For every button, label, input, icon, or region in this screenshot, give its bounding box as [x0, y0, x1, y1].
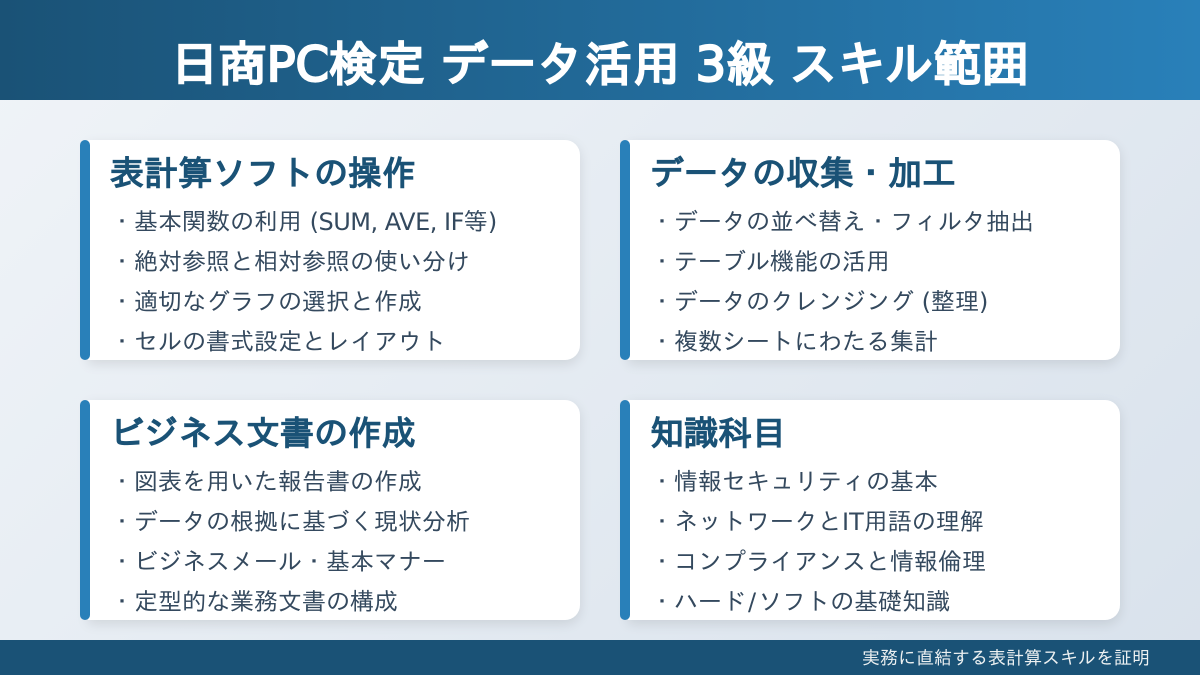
heading: knowledge subjects: 知識科目	[650, 414, 786, 454]
list: data skills	[650, 208, 1034, 356]
list: data skills: ・テーブル機能の活用	[650, 248, 890, 276]
header banner	[0, 0, 1200, 100]
footer bar	[0, 640, 1200, 675]
list: document skills	[110, 468, 470, 616]
panel: data collection and processing	[620, 140, 1122, 366]
list: document skills: ・ビジネスメール・基本マナー	[110, 548, 446, 576]
list: spreadsheet skills: ・セルの書式設定とレイアウト	[110, 328, 446, 356]
list: spreadsheet skills: ・適切なグラフの選択と作成	[110, 288, 422, 316]
list: data skills: ・データの並べ替え・フィルタ抽出	[650, 208, 1034, 236]
heading: business documents: ビジネス文書の作成	[110, 414, 416, 454]
list: document skills: ・定型的な業務文書の構成	[110, 588, 398, 616]
heading: data collection: データの収集・加工	[650, 154, 956, 194]
list: document skills: ・データの根拠に基づく現状分析	[110, 508, 470, 536]
panel: spreadsheet operations	[80, 140, 582, 366]
panel: business documents	[80, 400, 582, 626]
list: knowledge topics	[650, 468, 986, 616]
panel: knowledge subjects	[620, 400, 1122, 626]
list: knowledge topics: ・情報セキュリティの基本	[650, 468, 938, 496]
list: data skills: ・複数シートにわたる集計	[650, 328, 938, 356]
title: 日商PC検定 データ活用 3級 スキル範囲	[171, 37, 1029, 93]
list: knowledge topics: ・コンプライアンスと情報倫理	[650, 548, 986, 576]
list: spreadsheet skills: ・基本関数の利用 (SUM, AVE, IF等)	[110, 208, 497, 236]
list: document skills: ・図表を用いた報告書の作成	[110, 468, 422, 496]
list: knowledge topics: ・ネットワークとIT用語の理解	[650, 508, 984, 536]
list: spreadsheet skills: ・絶対参照と相対参照の使い分け	[110, 248, 470, 276]
list: data skills: ・データのクレンジング (整理)	[650, 288, 988, 316]
list: spreadsheet skills	[110, 208, 497, 356]
heading: spreadsheet operations: 表計算ソフトの操作	[110, 154, 416, 194]
list: knowledge topics: ・ハード/ソフトの基礎知識	[650, 588, 950, 616]
footer text: 実務に直結する表計算スキルを証明	[862, 648, 1150, 669]
